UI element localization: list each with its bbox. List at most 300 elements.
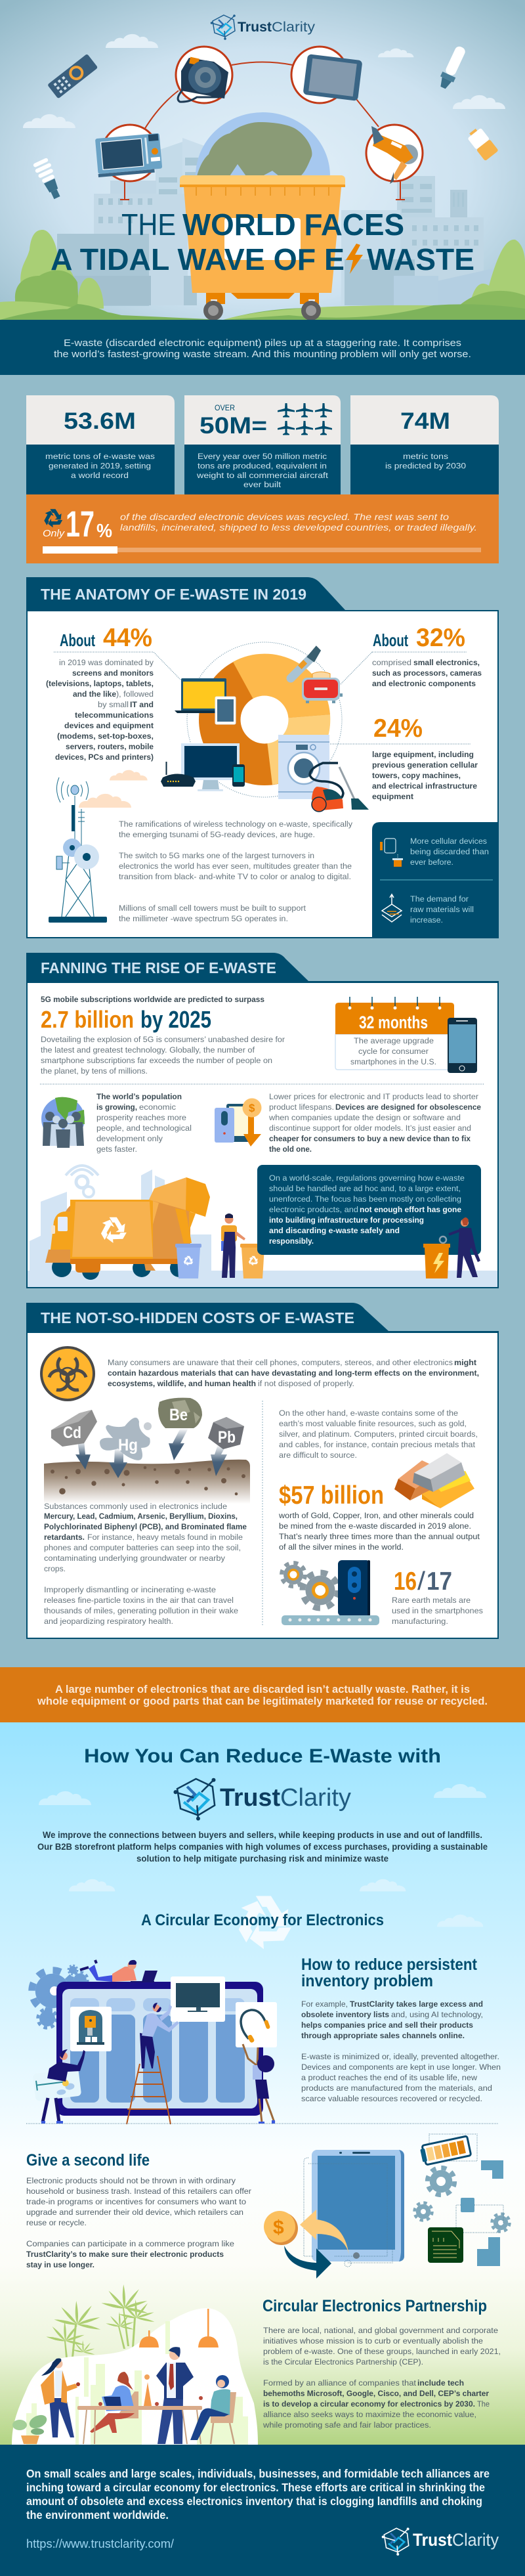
text: obsolescence: cheaper for consumers to buy a new device than to fix: [269, 1134, 471, 1143]
element: Cd: [51, 1410, 97, 1447]
title: [51, 207, 474, 276]
stat card: 50M: ever built: [243, 480, 282, 489]
callout: 17 percent recycled: of the discarded electronic devices was recycled. The rest was sent to: [120, 512, 449, 522]
text: 32 percent description: small electronics,: [413, 658, 480, 667]
stat: 16 of 17: 17: [427, 1567, 452, 1596]
figure: seated woman: [90, 2372, 138, 2433]
element: Pb: Pb: [218, 1428, 236, 1447]
icon: biohazard: [40, 1346, 95, 1401]
text: platform description: solution to help mitigate purchasing risk and minimize waste: [136, 1853, 388, 1864]
stat: 57 billion: $57 billion: [279, 1481, 384, 1510]
heading tab: THE NOT-SO-HIDDEN COSTS OF E-WASTE: [41, 1309, 354, 1326]
text: platform description: Our B2B storefront platform helps companies with high volumes of excess purchases, providing a sustainable: [37, 1841, 488, 1852]
logo: TrustClarity: Trust: [220, 1784, 280, 1812]
heading tab: [26, 577, 499, 611]
stat: 16 of 17: [392, 1567, 483, 1626]
text: 44 percent description: devices, PCs and printers): [55, 753, 154, 762]
figure: standing man: [156, 2347, 194, 2444]
text: population: gets faster.: [96, 1145, 137, 1154]
text: 24 percent description: towers, copy machines,: [372, 771, 461, 780]
text: obsolescence: the old one.: [269, 1145, 312, 1154]
text: 44 percent description: screens and monitors: [72, 668, 154, 678]
heading tab: FANNING THE RISE OF E-WASTE: [41, 959, 276, 976]
text: hazardous materials: might: [454, 1358, 476, 1367]
text: 32 percent description: [372, 658, 482, 688]
globe: [196, 112, 330, 176]
callout: demand box: raw materials will: [410, 905, 474, 914]
dumpster wheels: [203, 301, 321, 320]
text: valuable resources: and cables, for instance, contain precious metals that: [279, 1440, 476, 1449]
stat card: 53.6M: a world record: [71, 471, 129, 480]
element: Be: [158, 1398, 202, 1428]
text: 5G subscriptions: [41, 995, 285, 1076]
text: 5G subscriptions: 2.7 billion: [41, 1006, 134, 1033]
text: substances: releases fine-particle toxins in the air that can travel: [44, 1596, 234, 1605]
text: 44 percent description: ), followed: [116, 689, 154, 699]
text: 44 percent description: telecommunications: [75, 710, 154, 720]
panel: anatomy of e-waste: [26, 577, 499, 938]
arrow: dark return: [284, 2246, 331, 2279]
callout: 17 percent recycled: Only: [43, 528, 66, 539]
text: 44 percent description: by small: [98, 700, 129, 709]
text: circular electronics partnership: The: [477, 2399, 490, 2409]
heading: circular economy: A Circular Economy for Electronics: [141, 1911, 384, 1929]
heading: persistent inventory: [301, 1955, 478, 1990]
icon: phone to bin: [380, 839, 403, 867]
text: 44 percent description: [46, 658, 154, 762]
card: coffee machine: [70, 2007, 112, 2051]
text: population: is growing,: [96, 1102, 137, 1112]
figure: person on ladder: [140, 2003, 179, 2068]
text: substances: phones and computer batteries can seep into the soil,: [44, 1543, 241, 1552]
text: 5G subscriptions: smartphone subscriptions far exceeds the number of people on: [41, 1056, 272, 1065]
stat: about 44 percent: [60, 624, 152, 652]
heading: Circular Electronics Partnership: [262, 2297, 487, 2315]
text: 24 percent description: and electrical infrastructure: [372, 781, 477, 791]
bushes and ground: [0, 230, 525, 320]
arrow: Pb: [211, 1445, 227, 1476]
text: valuable resources: earth’s most valuable finite resources, such as gold,: [279, 1419, 467, 1428]
illustration: inventory board: [32, 1960, 277, 2124]
text: persistent inventory: through appropriate sales channels online.: [301, 2031, 465, 2040]
stat card: 53.6M: [26, 395, 175, 495]
text: substances: retardants.: [44, 1533, 85, 1542]
text: second life: upgrade and surrender their old device, which retailers can: [26, 2208, 243, 2217]
lamps: [139, 2309, 219, 2347]
panel: fanning the rise: [26, 953, 499, 1288]
heading: how you can reduce: How You Can Reduce E-Waste with: [84, 1745, 441, 1767]
city skyline: [57, 138, 525, 306]
icon: recycle: [41, 509, 62, 530]
icon: shaver: [291, 648, 319, 678]
icon: washing machine: [278, 735, 329, 799]
panel: hidden costs: [26, 1303, 499, 1638]
text: conclusion: inching toward a circular economy for electronics. These efforts are critical in shrinking the: [26, 2481, 485, 2494]
text: population: The world’s population: [96, 1092, 182, 1101]
logo: TrustClarity: Clarity: [280, 1784, 351, 1812]
figure: standing woman: [41, 2359, 80, 2437]
callout: 17 percent recycled: %: [96, 521, 112, 542]
section background: [0, 1722, 525, 2445]
text: conclusion: On small scales and large scales, individuals, businesses, and formidable tech alliances are: [26, 2467, 490, 2480]
stat: 57 billion: That’s nearly three times more than the annual output: [279, 1532, 480, 1541]
illustration: toxic metals seeping into soil: [44, 1398, 250, 1504]
text: circular electronics partnership: problem of e-waste. One of these groups, launched in early 2021,: [263, 2347, 501, 2356]
calendar: 32 months: cycle for consumer: [358, 1047, 429, 1056]
text: circular electronics partnership: is the Circular Electronics Partnership (CEP).: [263, 2357, 423, 2367]
icon: tablet with falling price: $: [249, 1102, 255, 1114]
element: Be: Be: [169, 1406, 188, 1424]
text: obsolescence: product lifespans.: [269, 1102, 334, 1112]
icon: coin: [264, 2211, 298, 2245]
callout: regulations: [257, 1165, 481, 1255]
icon: microwave: [95, 133, 163, 177]
text: 24 percent description: equipment: [372, 792, 413, 801]
callout: 17 percent recycled: [26, 494, 499, 563]
text: substances: For instance, heavy metals found in mobile: [87, 1533, 243, 1542]
icon circles: [102, 47, 423, 181]
stat card: 53.6M: metric tons of e-waste was: [45, 452, 155, 461]
text: 24 percent description: previous generation cellular: [372, 760, 478, 770]
callout: demand box: increase.: [410, 915, 443, 925]
logo: footer: [382, 2527, 499, 2556]
banner: reuse statement: [0, 1667, 525, 1722]
icon: router: [161, 762, 196, 787]
text: conclusion: the environment worldwide.: [26, 2508, 169, 2521]
text: second life: trade-in programs or incentives for consumers who want to: [26, 2197, 246, 2206]
illustration: office meeting: [12, 2284, 258, 2445]
text: substances: Mercury, Lead, Cadmium, Arsenic, Beryllium, Dioxins,: [44, 1512, 238, 1521]
text: obsolescence: Devices are designed for obsolescence: [335, 1102, 481, 1112]
stat card: 50M: tons are produced, equivalent in: [198, 461, 327, 470]
callout: demand box: ever before.: [410, 858, 453, 867]
calendar: 32 months: The average upgrade: [354, 1036, 434, 1045]
banner: reuse statement: A large number of electronics that are discarded isn’t actually waste. Rather, it is: [55, 1683, 470, 1695]
text: circular electronics partnership: There are local, national, and global government and corporate: [263, 2326, 498, 2335]
banner: reuse statement: whole equipment or good parts that can be legitimately marketed for reuse or recycled.: [37, 1695, 488, 1707]
text: 44 percent description: in 2019 was dominated by: [59, 658, 154, 667]
icon: tablet with falling price: [215, 1098, 261, 1146]
stat card: 74M: 74M: [400, 408, 450, 434]
text: wireless technology: The ramifications of wireless technology on e-waste, specifically: [119, 819, 353, 829]
text: wireless technology: [119, 819, 353, 923]
icon: circuit board: [428, 2227, 463, 2263]
text: 5G subscriptions: the latest and greatest technology. Globally, the number of: [41, 1045, 255, 1055]
text: circular electronics partnership: behemoths Microsoft, Google, Cisco, and Dell, CEP’s charter: [263, 2389, 489, 2398]
icon: smartphone: [448, 1018, 477, 1073]
element: Hg: [100, 1418, 152, 1460]
text: 44 percent description: (modems, set-top-boxes,: [57, 731, 154, 741]
potted plant: [12, 2412, 49, 2444]
icon: CFL bulb: [436, 44, 469, 91]
text: substances: Substances commonly used in electronics include: [44, 1502, 227, 1511]
callout: regulations: and discarding e-waste safely and: [269, 1226, 400, 1235]
stat: about 32 percent: 32%: [416, 624, 465, 652]
icon: tablet: [303, 54, 362, 101]
element: Cd: Cd: [63, 1424, 81, 1442]
icon: battery: [419, 2134, 477, 2166]
connecting arc: [144, 62, 379, 129]
laptop on table: [98, 2397, 159, 2406]
text: hazardous materials: if not disposed of properly.: [258, 1379, 354, 1388]
callout: demand box: being discarded than: [410, 847, 489, 856]
ground: [28, 1271, 497, 1287]
element: Pb: [208, 1417, 244, 1449]
icon: raw material layers: [382, 894, 402, 922]
icon: aircraft: [278, 403, 332, 435]
text: population: prosperity reaches more: [96, 1113, 186, 1122]
stat: 57 billion: of all the silver mines in the world.: [279, 1542, 404, 1552]
stat card: 53.6M: generated in 2019, setting: [49, 461, 151, 470]
text: circular electronics partnership: initiatives whose mission is to curb or eventually abolish the: [263, 2336, 483, 2346]
text: second life: Companies can participate in a commerce program like: [26, 2239, 234, 2248]
text: 24 percent description: large equipment, including: [372, 750, 474, 759]
icon: spiral bulb: [32, 157, 65, 202]
text: circular electronics partnership: is to develop a circular economy for electronics by 2030.: [263, 2399, 475, 2409]
icon: remote control: [47, 54, 98, 98]
text: substances: contaminating underlying groundwater or nearby: [44, 1554, 226, 1563]
heading tab: [26, 953, 499, 983]
text: circular electronics partnership: Formed by an alliance of companies that: [263, 2378, 417, 2388]
text: wireless technology: the millimeter -wave spectrum 5G operates in.: [119, 914, 288, 923]
intro band: the world’s fastest-growing waste stream. And this mounting problem will only get worse.: [54, 349, 471, 360]
text: population: development only: [96, 1134, 163, 1143]
text: hazardous materials: ecosystems, wildlife, and human health: [108, 1379, 256, 1388]
text: circular electronics partnership: alliance also seeks ways to maximize the economic value,: [263, 2410, 476, 2419]
text: wireless technology: The switch to 5G marks one of the largest turnovers in: [119, 851, 314, 860]
progress bar: [43, 546, 481, 554]
ladder: [127, 2056, 171, 2124]
card: TV: [171, 1976, 225, 2022]
stat: 24 percent: 24%: [373, 714, 423, 743]
text: 32 percent description: comprised: [372, 658, 411, 667]
text: valuable resources: [279, 1408, 478, 1460]
text: persistent inventory: TrustClarity takes large excess and: [350, 1999, 483, 2009]
logo: top: Trust: [238, 20, 272, 35]
text: second life: household or business trash. Instead of this retailers can offer: [26, 2187, 251, 2196]
stat card: 50M: [184, 395, 341, 495]
figure: seated woman right: [190, 2375, 236, 2444]
illustration: worker: [221, 1213, 245, 1278]
component blocks: [461, 2160, 503, 2266]
illustration: garbage truck: [45, 1177, 210, 1280]
text: circular electronics partnership: while promoting safe and fair labor practices.: [262, 2420, 431, 2430]
text: persistent inventory: a product reaches the end of its usable life, new: [301, 2073, 477, 2082]
card: headphones: [236, 2002, 277, 2047]
callout: regulations: should be handled are ad hoc and, to a large extent,: [269, 1184, 461, 1193]
text: 44 percent description: (televisions, laptops, tablets,: [46, 679, 154, 688]
icon: battery: [466, 126, 499, 161]
callout: demand box: The demand for: [410, 894, 469, 904]
callout: 17 percent recycled: 17: [66, 503, 94, 544]
element: Hg: Hg: [118, 1436, 138, 1454]
title: THE: [121, 207, 176, 242]
text: obsolescence: discontinue support for older models. It’s just easier and: [269, 1124, 471, 1133]
text: platform description: We improve the connections between buyers and sellers, while keeping products in use and out of landfills.: [43, 1829, 482, 1840]
icon: gold bars: [394, 1453, 474, 1508]
icon: laptop: [175, 678, 226, 713]
text: persistent inventory: and, using AI technology,: [391, 2010, 483, 2019]
text: conclusion: [26, 2467, 490, 2521]
calendar: 32 months: [335, 997, 454, 1070]
city background: [30, 1166, 211, 1271]
text: 44 percent description: devices and equipment: [64, 721, 154, 730]
arrow: Cd: [75, 1440, 91, 1470]
stat card: 74M: is predicted by 2030: [385, 461, 466, 470]
clouds: [39, 1784, 486, 1805]
clouds: [69, 1879, 483, 1927]
icon: tablet: [215, 697, 236, 724]
footer: [0, 2445, 525, 2576]
text: second life: [26, 2176, 251, 2269]
text: persistent inventory: For example,: [301, 1999, 348, 2009]
icon: coin: $: [273, 2217, 284, 2238]
heading tab: [26, 1303, 499, 1333]
icon: toaster: [302, 672, 343, 703]
stat card: 74M: [350, 395, 499, 495]
text: wireless technology: electronics the world has ever seen, multitudes greater than the: [119, 862, 352, 871]
icon: camera: [178, 57, 228, 102]
text: 32 percent description: and electronic components: [372, 679, 476, 688]
heading: persistent inventory: How to reduce persistent: [301, 1955, 478, 1974]
figure: person lying on board: [80, 1960, 158, 1982]
clouds: [23, 34, 505, 128]
dumpster: [180, 175, 345, 309]
text: second life: TrustClarity’s to make sure their electronic products: [26, 2250, 224, 2259]
icon: vacuum cleaner: [310, 763, 369, 812]
stat: about 32 percent: About: [373, 630, 408, 650]
text: 5G subscriptions: 5G mobile subscriptions worldwide are predicted to surpass: [41, 995, 264, 1004]
card: fan: [33, 2068, 81, 2101]
plants: [46, 2284, 155, 2357]
heading: give a second life: Give a second life: [26, 2151, 150, 2170]
stat: 16 of 17: 16: [394, 1567, 417, 1596]
arrow: Hg: [109, 1448, 127, 1478]
callout: regulations: not enough effort has gone: [360, 1205, 461, 1214]
stat card: 50M: OVER: [215, 403, 235, 412]
logo: footer: Trust: [413, 2530, 452, 2550]
callout: regulations: responsibly.: [269, 1236, 314, 1246]
text: valuable resources: are difficult to source.: [279, 1451, 357, 1460]
text: obsolescence: when companies update the design or software and: [268, 1113, 461, 1122]
text: population: [96, 1092, 192, 1154]
arrow: yellow return: [300, 2210, 349, 2256]
text: persistent inventory: E-waste is minimized or, ideally, prevented altogether.: [301, 2052, 499, 2061]
text: second life: stay in use longer.: [26, 2260, 94, 2269]
icon: large recycle symbol: [230, 1896, 291, 1955]
text: 5G subscriptions: by 2025: [140, 1006, 211, 1033]
heading tab: THE ANATOMY OF E-WASTE IN 2019: [41, 586, 306, 603]
callout: regulations: electronic products, and: [269, 1205, 358, 1214]
text: substances: [44, 1502, 247, 1626]
text: 5G subscriptions: Dovetailing the explosion of 5G is consumers’ unabashed desire for: [41, 1035, 285, 1044]
text: 32 percent description: such as processors, cameras: [372, 668, 482, 678]
text: population: people, and technological: [96, 1124, 192, 1133]
icon: orange bin: [240, 1244, 266, 1278]
text: persistent inventory: obsolete inventory lists: [301, 2010, 389, 2019]
text: wireless technology: Millions of small cell towers must be built to support: [119, 904, 306, 913]
callout: regulations: into building infrastructure for processing: [269, 1215, 424, 1225]
text: 44 percent description: servers, routers, mobile: [66, 742, 154, 751]
intro band: [0, 320, 525, 375]
icon: blue bin: [175, 1244, 201, 1278]
text: platform description: [37, 1829, 488, 1864]
stat: about 32 percent: [373, 624, 465, 652]
callout: 17 percent recycled: landfills, incinerated, shipped to less developed countries, or traded illegally.: [120, 522, 477, 533]
stat: 57 billion: worth of Gold, Copper, Iron, and other minerals could: [278, 1511, 474, 1520]
text: substances: thousands of miles, generating pollution in their wake: [44, 1606, 238, 1615]
text: 5G subscriptions: the planet, by tens of millions.: [41, 1066, 148, 1076]
stat: 16 of 17: manufacturing.: [392, 1617, 448, 1626]
text: 24 percent description: [372, 750, 478, 801]
text: hazardous materials: contain hazardous materials that can have devastating and long-term effects on the environment,: [108, 1368, 479, 1378]
text: persistent inventory: scarce valuable resources recovered or recycled.: [301, 2094, 482, 2103]
text: valuable resources: On the other hand, e-waste contains some of the: [279, 1408, 458, 1418]
callout: regulations: unenforced. The focus has been mostly on collecting: [269, 1194, 461, 1204]
stat: about 44 percent: About: [60, 630, 95, 650]
calendar: 32 months: smartphones in the U.S.: [350, 1057, 436, 1066]
text: conclusion: amount of obsolete and excess electronics inventory that is clogging landfills and choking: [26, 2495, 482, 2508]
illustration: tablet and components: [264, 2134, 509, 2279]
icon: hair dryer: [371, 126, 418, 184]
logo: TrustClarity: [173, 1778, 351, 1821]
text: persistent inventory: [301, 1999, 501, 2103]
text: 44 percent description: and the like: [73, 689, 116, 699]
stat: 57 billion: be mined from the e-waste discarded in 2019 alone.: [279, 1521, 471, 1531]
icon: desktop monitor: [181, 743, 240, 791]
title: WORLD FACES: [182, 207, 404, 242]
table: [77, 2374, 202, 2444]
gears: [32, 1965, 88, 2028]
text: substances: Polychlorinated Biphenyl (PCB), and Brominated flame: [44, 1522, 247, 1531]
intro band: E-waste (discarded electronic equipment) piles up at a staggering rate. It comprises: [64, 338, 461, 349]
text: obsolescence: Lower prices for electronic and IT products lead to shorter: [269, 1092, 478, 1101]
heading: persistent inventory: inventory problem: [301, 1972, 433, 1990]
figure: person with fan: [41, 2049, 85, 2124]
icon: lightning dash: [346, 244, 363, 274]
stat: 16 of 17: Rare earth metals are: [392, 1596, 471, 1605]
text: wireless technology: transition from black- and-white TV to color or analog to digital.: [119, 872, 351, 881]
text: persistent inventory: helps companies price and sell their products: [301, 2020, 473, 2030]
link: website: https://www.trustclarity.com/: [26, 2537, 174, 2550]
text: obsolescence: [268, 1092, 481, 1154]
text: population: economic: [139, 1102, 176, 1112]
text: substances: crops.: [44, 1564, 66, 1573]
stat card: 50M: Every year over 50 million metric: [198, 452, 327, 461]
icon: population: [41, 1097, 85, 1148]
text: circular electronics partnership: [262, 2297, 501, 2430]
text: 44 percent description: IT and: [130, 700, 154, 709]
stat card: 50M: 50M=: [200, 413, 267, 439]
callout: regulations: On a world-scale, regulations governing how e-waste: [269, 1173, 465, 1183]
clouds: [79, 770, 148, 808]
stat: 16 of 17: /: [417, 1567, 425, 1596]
title: A TIDAL WAVE OF E: [51, 242, 345, 276]
text: hazardous materials: Many consumers are unaware that their cell phones, computers, stereos, and other electronics: [108, 1358, 453, 1367]
text: second life: reuse or recycle.: [26, 2218, 87, 2227]
text: substances: Improperly dismantling or incinerating e-waste: [44, 1585, 216, 1594]
stat: 16 of 17: used in the smartphones: [392, 1606, 483, 1615]
text: persistent inventory: Devices and components are kept in use longer. When: [301, 2063, 501, 2072]
title: WASTE: [367, 242, 474, 276]
icon: smartphone: [232, 764, 245, 787]
icon: cell tower: [49, 777, 107, 923]
stat card: 74M: metric tons: [403, 452, 448, 461]
stat card: 53.6M: 53.6M: [64, 408, 136, 434]
calendar: 32 months: 32 months: [359, 1013, 428, 1032]
callout: demand box: More cellular devices: [410, 837, 487, 846]
logo: footer: Clarity: [452, 2530, 499, 2550]
